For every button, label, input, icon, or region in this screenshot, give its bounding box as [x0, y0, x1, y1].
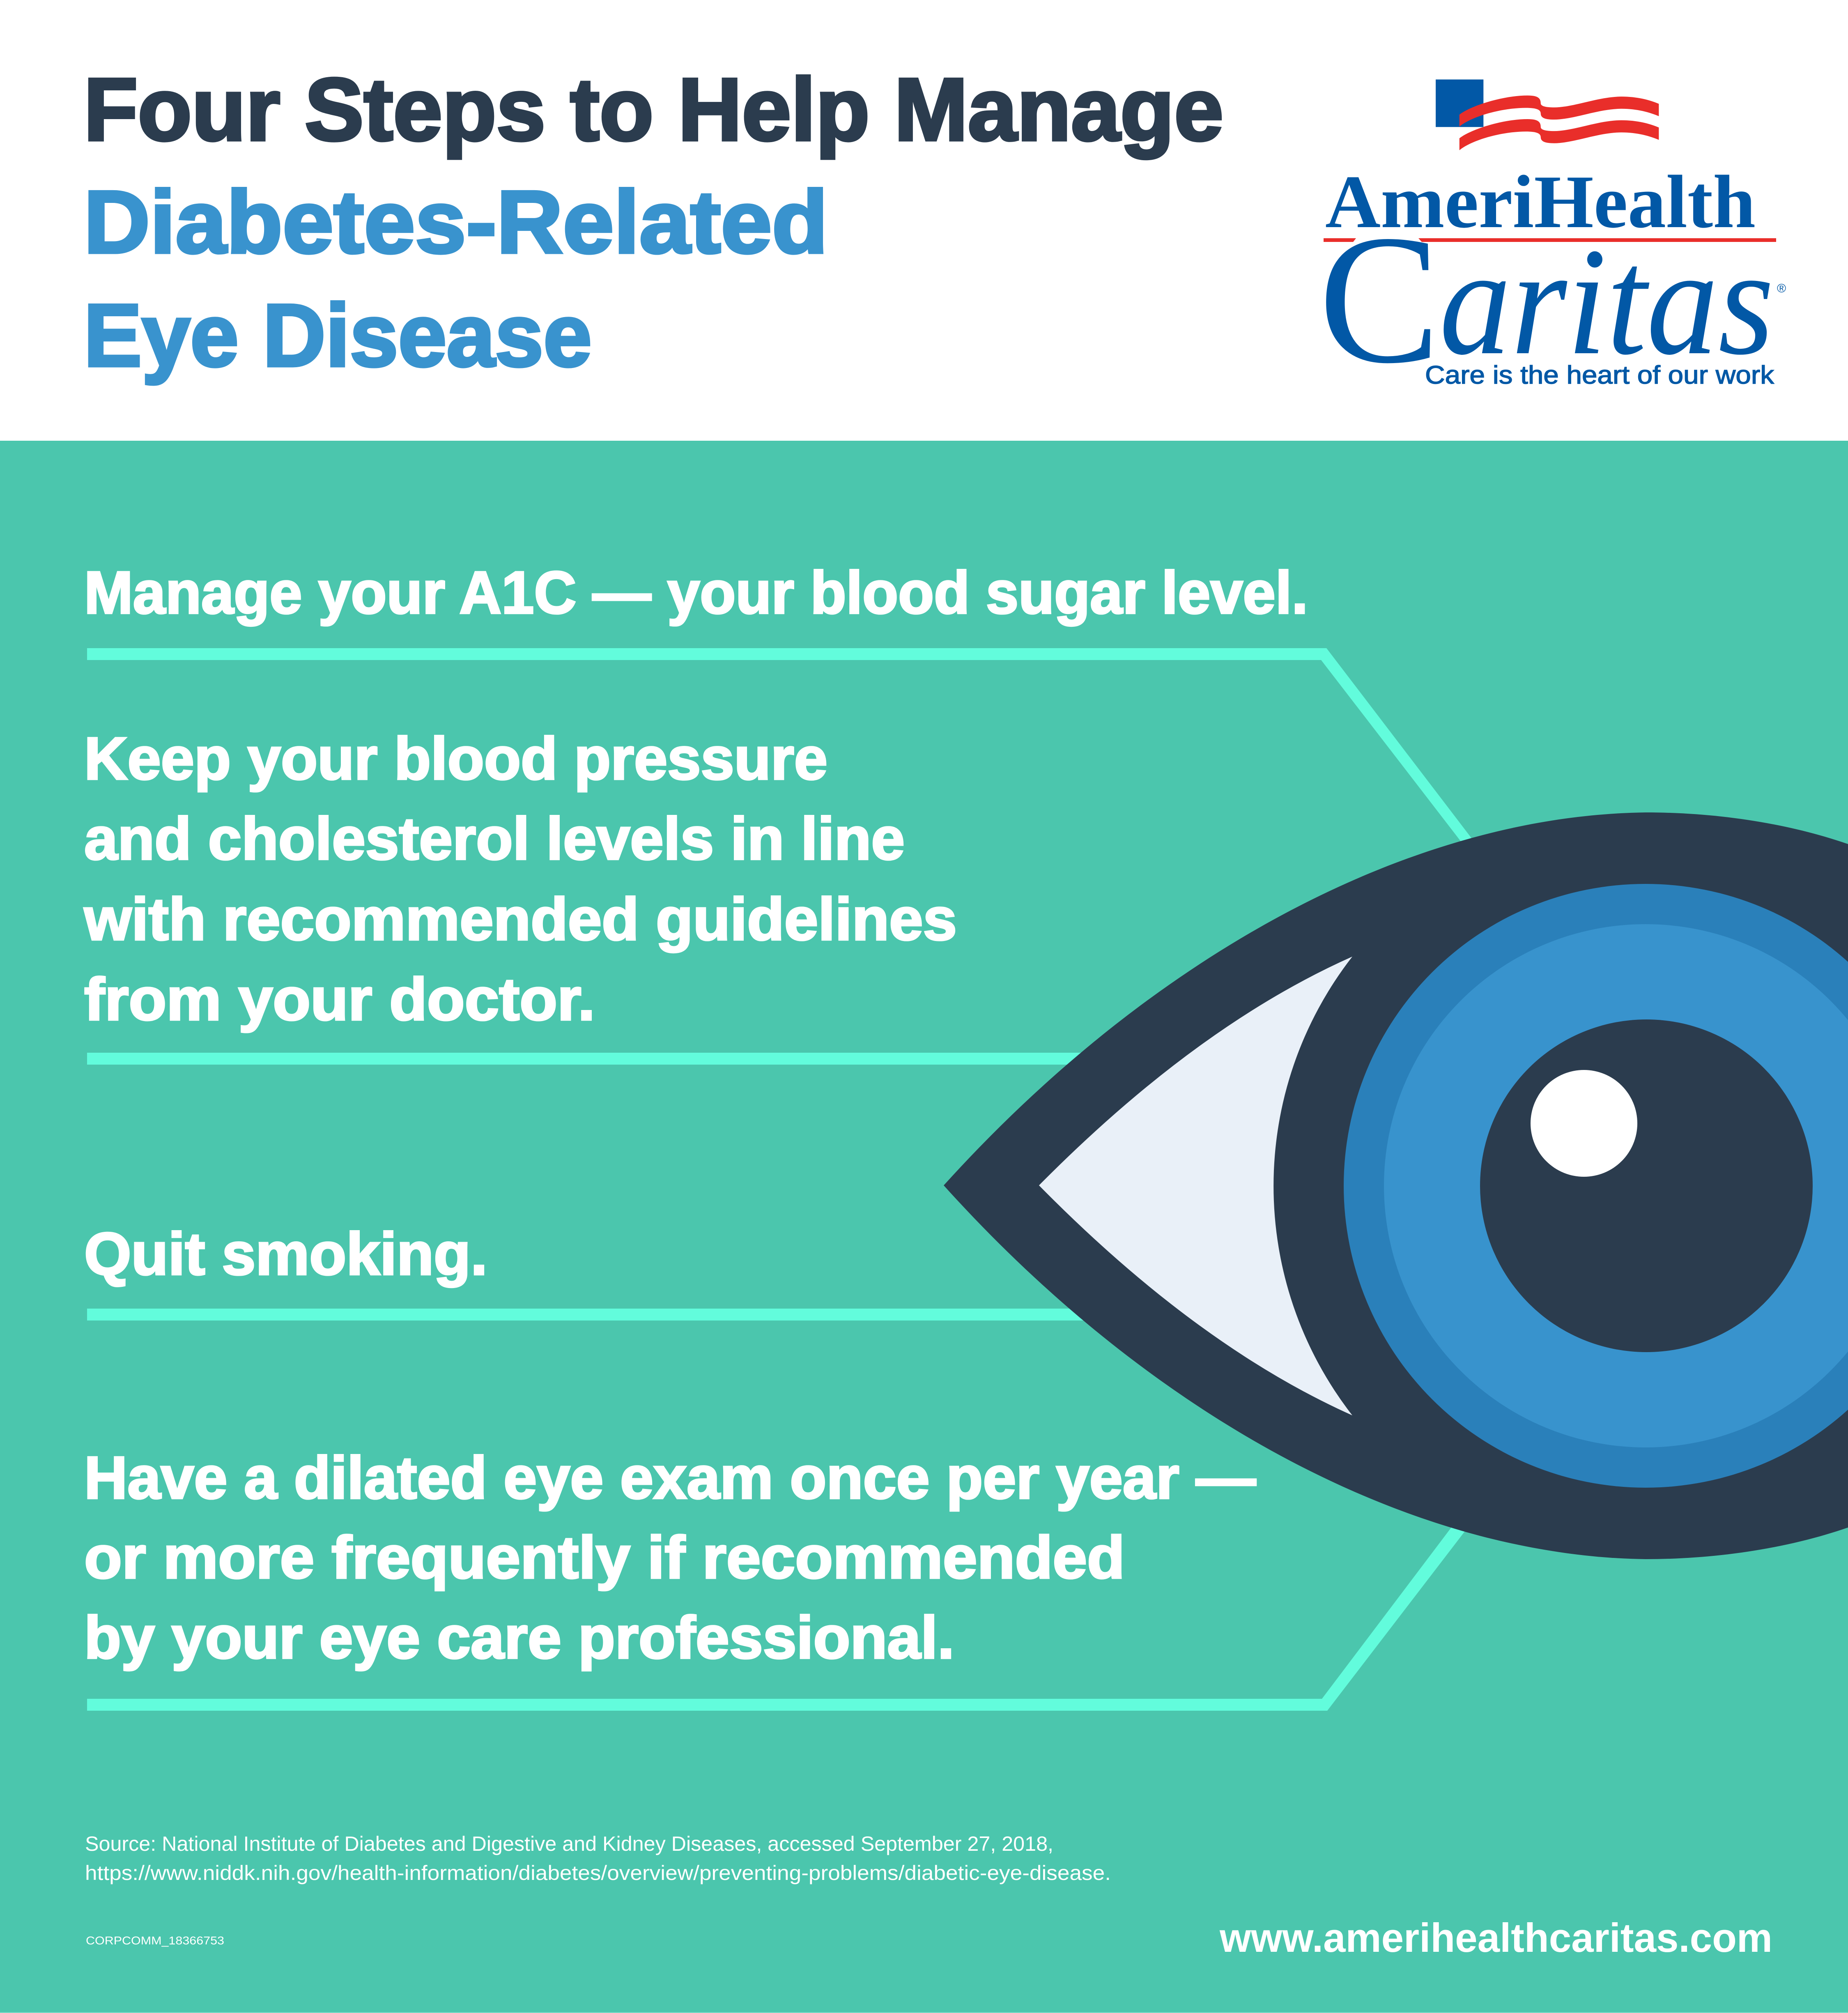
step 2 text: with recommended guidelines	[84, 886, 957, 952]
title line 2: Diabetes-Related	[84, 172, 828, 271]
eye iris inner	[1384, 924, 1848, 1447]
second rule	[87, 1053, 1196, 1065]
connector rules	[87, 648, 1499, 1711]
logo AmeriHealth wordmark: AmeriHealth	[1325, 160, 1756, 244]
document code: CORPCOMM_18366753	[86, 1934, 224, 1947]
step 4 text: or more frequently if recommended	[84, 1524, 1125, 1591]
panel: teal background	[0, 441, 1848, 2012]
third rule	[87, 1309, 1196, 1321]
title line 1: Four Steps to Help Manage	[84, 60, 1223, 159]
step 2 text: and cholesterol levels in line	[84, 805, 905, 872]
step 2 text	[84, 725, 957, 1033]
title line 3: Eye Disease	[84, 285, 592, 385]
step 4 text: Have a dilated eye exam once per year —	[84, 1444, 1256, 1511]
logo flag	[1436, 79, 1659, 150]
eye highlight	[1531, 1070, 1637, 1177]
step 2 text: from your doctor.	[84, 966, 595, 1033]
logo Caritas wordmark: C	[1319, 197, 1440, 402]
logo tagline: Care is the heart of our work	[1425, 361, 1774, 389]
source note: https://www.niddk.nih.gov/health-information/diabetes/overview/preventing-problems/diabetic-eye-disease.	[85, 1861, 1111, 1884]
step 3 text: Quit smoking.	[84, 1220, 487, 1287]
eye pupil	[1480, 1019, 1813, 1352]
eye outline	[944, 812, 1848, 1559]
bottom rule with diagonal	[87, 1481, 1499, 1711]
icon: eye	[944, 812, 1848, 1559]
logo Caritas wordmark: aritas	[1439, 216, 1774, 387]
logo: AmeriHealth Caritas	[1319, 79, 1786, 402]
title	[84, 60, 1223, 385]
logo Caritas wordmark: ®	[1777, 282, 1786, 295]
step 4 text: by your eye care professional.	[84, 1604, 954, 1671]
source note	[85, 1832, 1111, 1884]
logo Caritas wordmark	[1319, 197, 1786, 402]
step 2 text: Keep your blood pressure	[84, 725, 827, 792]
step 1 text: Manage your A1C — your blood sugar level.	[84, 559, 1308, 626]
step 4 text	[84, 1444, 1256, 1671]
eye sclera	[1039, 957, 1352, 1415]
website url: www.amerihealthcaritas.com	[1219, 1915, 1772, 1960]
top rule with diagonal	[87, 648, 1495, 875]
logo red rule	[1324, 238, 1776, 242]
eye iris outer	[1344, 884, 1848, 1488]
source note: Source: National Institute of Diabetes and Digestive and Kidney Diseases, accessed September 27, 2018,	[85, 1832, 1053, 1855]
